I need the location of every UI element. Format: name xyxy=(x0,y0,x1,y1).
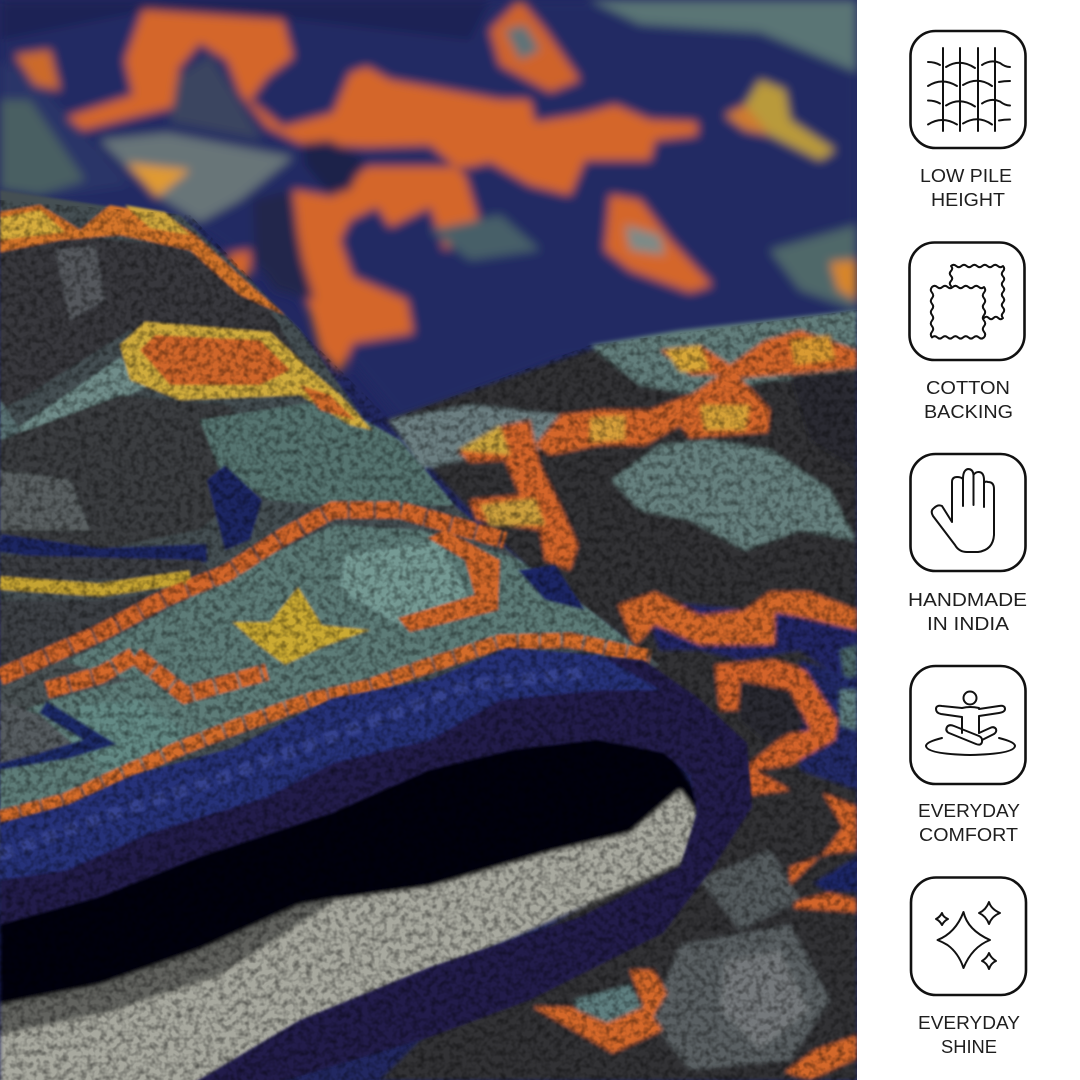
icon: seated person on mat xyxy=(926,692,1015,755)
fold pattern field xyxy=(0,525,640,815)
orange motif upper xyxy=(67,10,697,373)
label: everyday comfort: EVERYDAY xyxy=(918,800,1020,821)
feature: cotton backing xyxy=(910,242,1024,422)
label: cotton backing: COTTON xyxy=(926,377,1010,398)
label: handmade in india: HANDMADE xyxy=(908,589,1027,610)
grey eye motif xyxy=(100,133,293,222)
label: cotton backing xyxy=(924,377,1013,422)
background rug pattern, lower right xyxy=(380,310,857,1080)
label: low pile height: LOW PILE xyxy=(920,165,1012,186)
feature: low pile height xyxy=(910,31,1026,210)
label: cotton backing: BACKING xyxy=(924,401,1013,422)
white feature panel xyxy=(857,0,1080,1080)
background rug pattern, upper area xyxy=(0,0,857,377)
label: everyday shine: EVERYDAY xyxy=(918,1012,1020,1033)
rug photograph xyxy=(0,0,857,1080)
label: low pile height: HEIGHT xyxy=(931,189,1005,210)
label: everyday shine xyxy=(918,1012,1020,1057)
label: everyday shine: SHINE xyxy=(941,1036,997,1057)
label: handmade in india xyxy=(908,589,1027,634)
feature: handmade in india xyxy=(908,454,1027,634)
feature: everyday comfort xyxy=(910,666,1026,845)
grain texture overlay xyxy=(0,200,857,1080)
rug underside: dark hollow and light backing xyxy=(0,735,700,1080)
icon: sparkles xyxy=(936,902,1000,969)
yellow bordered orange medallion xyxy=(120,322,372,430)
label: everyday comfort xyxy=(918,800,1020,845)
feature: everyday shine xyxy=(911,878,1026,1057)
icon: hand xyxy=(932,469,994,552)
folded rug top surface xyxy=(0,190,660,860)
icon: pile weave xyxy=(928,48,1010,131)
orange stripes on the fold xyxy=(0,510,505,677)
label: handmade in india: IN INDIA xyxy=(927,613,1010,634)
navy rolled edge xyxy=(0,648,752,1080)
label: low pile height xyxy=(920,165,1012,210)
icon: fabric swatches xyxy=(931,265,1004,339)
top orange and yellow strip xyxy=(0,205,285,315)
label: everyday comfort: COMFORT xyxy=(919,824,1018,845)
